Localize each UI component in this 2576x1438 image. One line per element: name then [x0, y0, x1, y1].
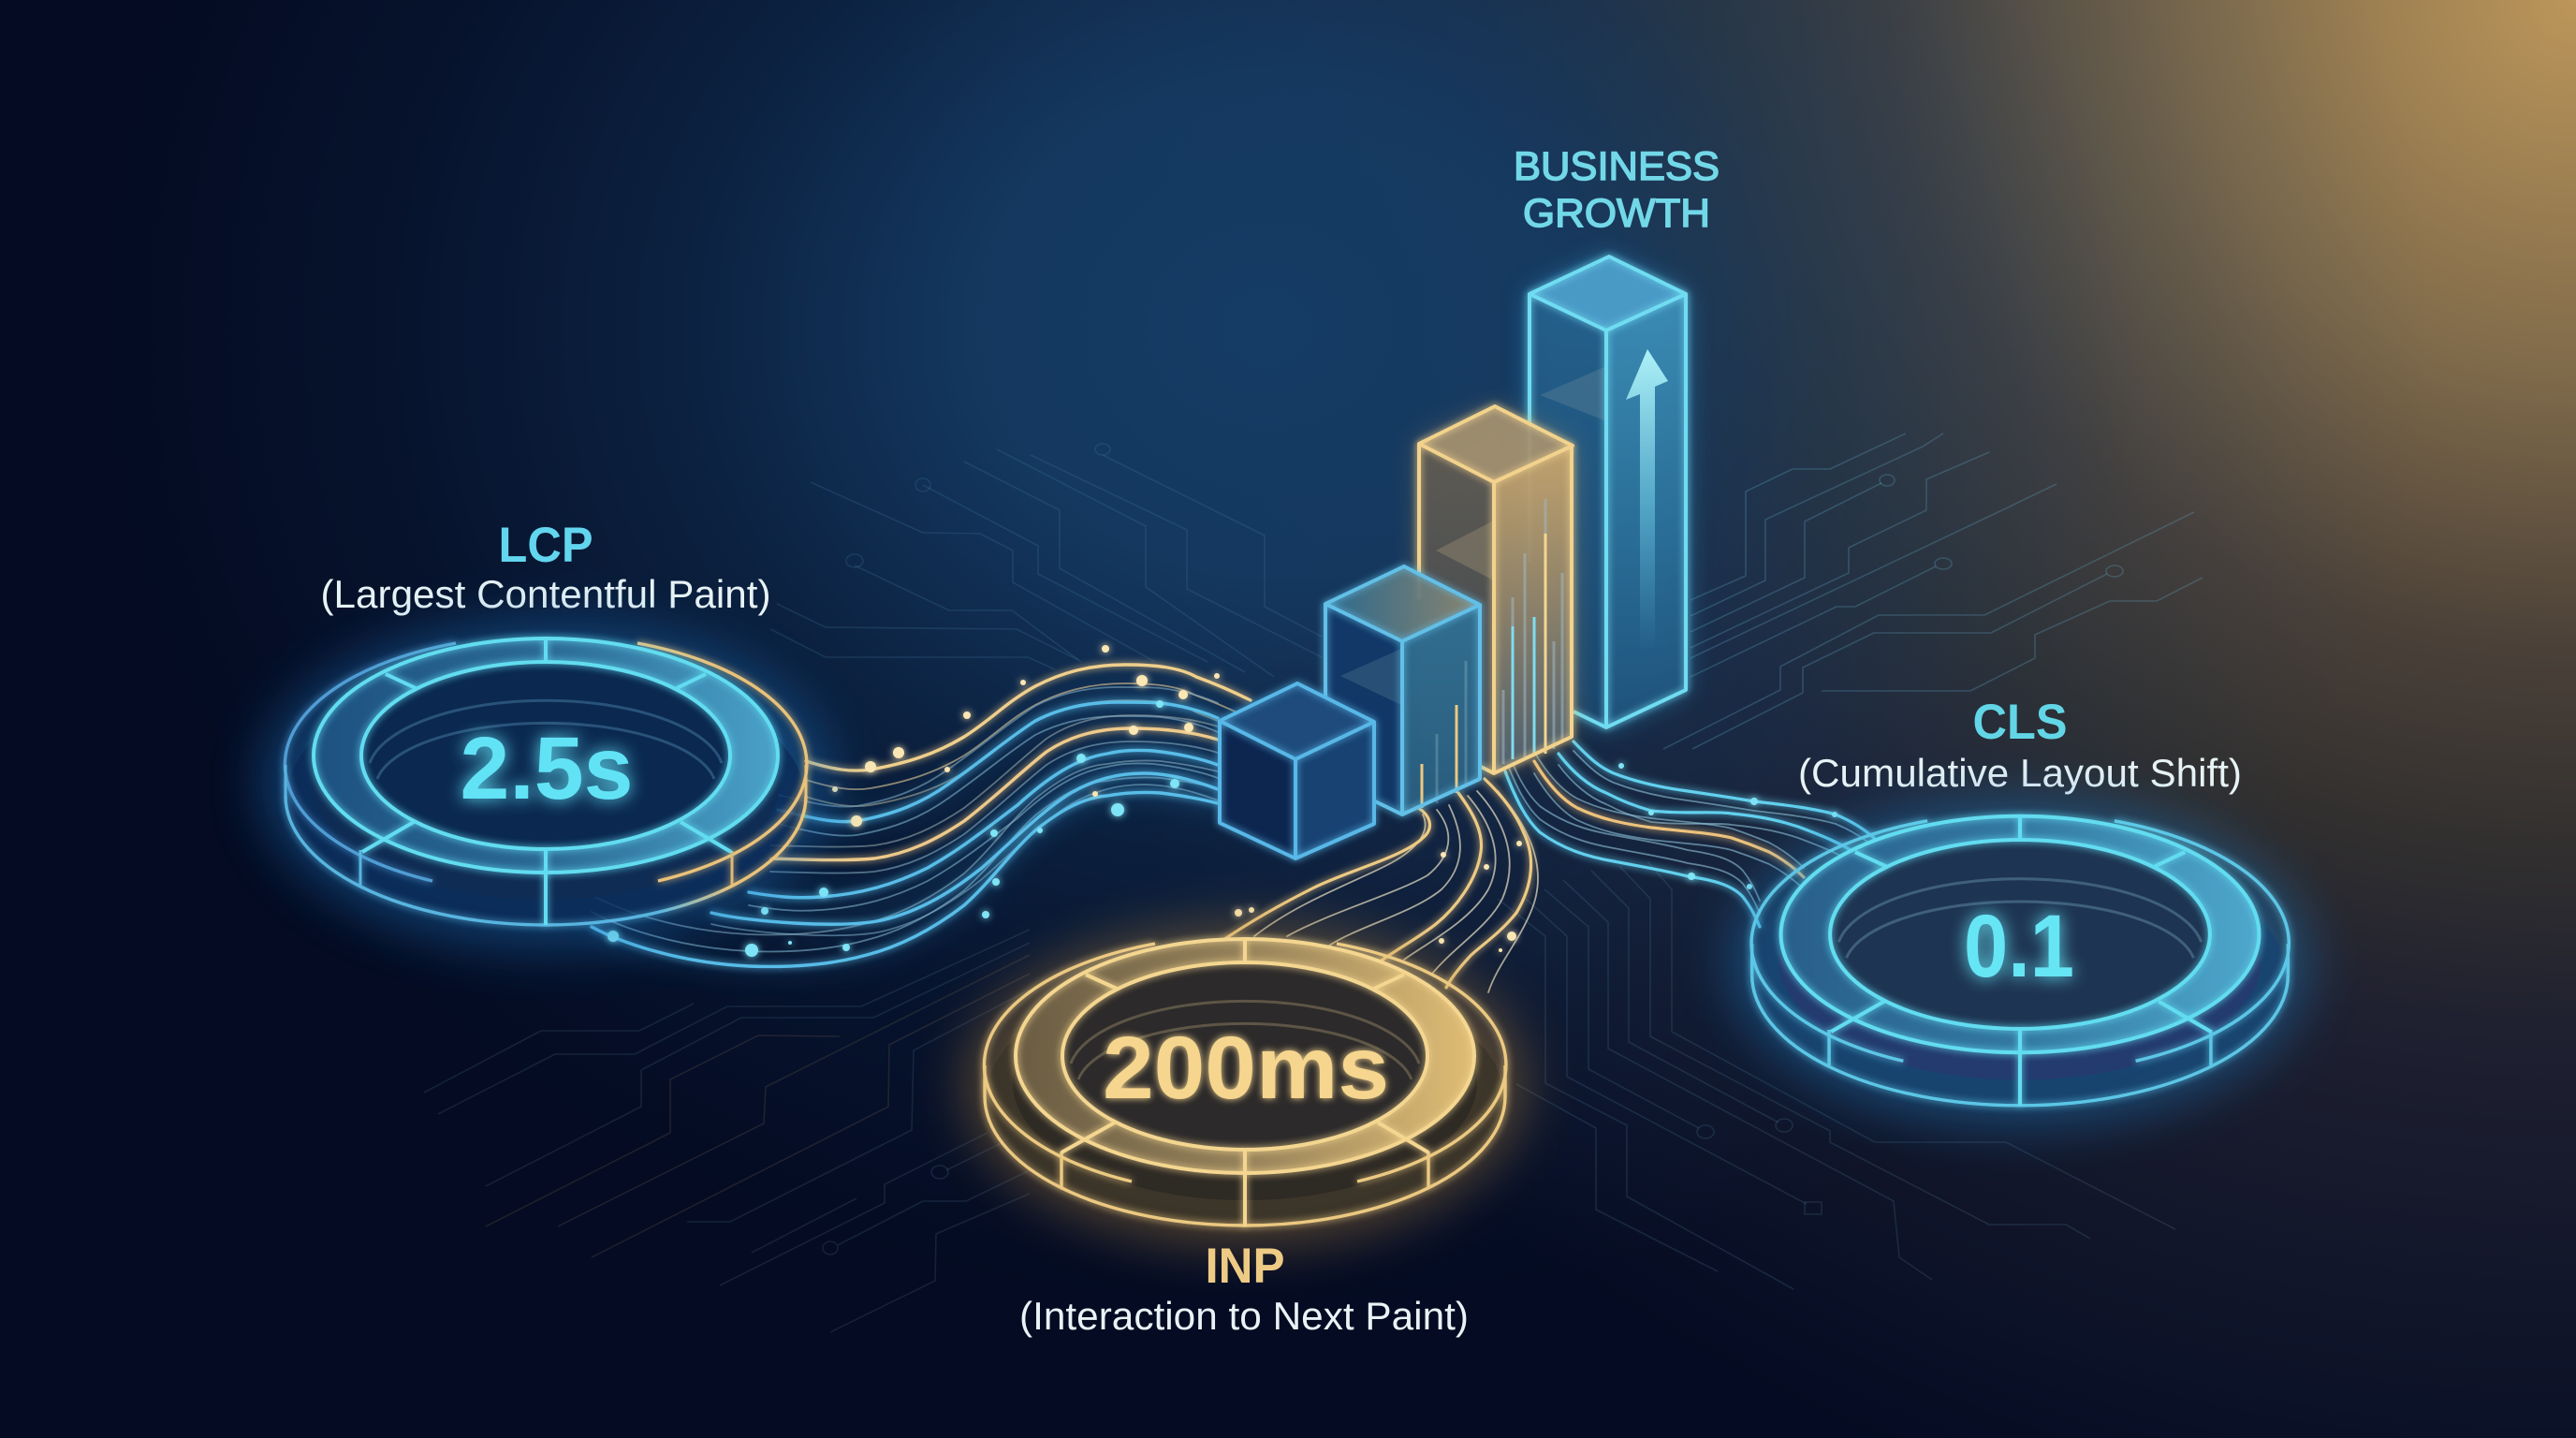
LCP ring: [260, 620, 831, 947]
business growth heading: GROWTH: [1523, 191, 1710, 236]
LCP ring top lines: [314, 638, 778, 925]
INP heading: INP: [1206, 1239, 1284, 1294]
panel: INP metric: [964, 923, 1526, 1338]
main stream lines: [592, 665, 1251, 966]
CLS ring rim lines: [1751, 821, 2289, 1106]
data stream: CLS to growth bars: [1505, 741, 1874, 927]
panel: CLS metric: [1731, 695, 2309, 1125]
main stream lines: [1505, 741, 1874, 927]
gold bar streaks: [1503, 499, 1562, 764]
CLS heading: CLS: [1973, 695, 2067, 750]
LCP subtitle: (Largest Contentful Paint): [320, 572, 771, 616]
INP ring rim lines: [984, 944, 1506, 1225]
data stream: LCP to growth bars: [592, 665, 1251, 966]
LCP value: 2.5s: [461, 719, 633, 818]
LCP heading: LCP: [498, 518, 593, 573]
stream glow: [592, 702, 1218, 966]
main stream lines: [1223, 779, 1531, 988]
bar 3: gold bar: [1419, 406, 1573, 773]
CLS ring: [1731, 800, 2309, 1125]
bar 1: small cube: [1220, 683, 1374, 858]
CLS ring top lines: [1781, 816, 2259, 1106]
CLS subtitle: (Cumulative Layout Shift): [1798, 751, 2242, 795]
particles: [607, 645, 1837, 957]
LCP ring rim lines: [285, 643, 807, 925]
mid bar streaks: [1422, 661, 1466, 808]
INP ring: [964, 923, 1526, 1245]
business growth heading: [1514, 144, 1720, 236]
bar 4: tallest blue bar with arrow: [1530, 257, 1686, 727]
data stream: INP to growth bars: [1223, 779, 1538, 992]
INP ring top lines: [1016, 939, 1474, 1226]
INP subtitle: (Interaction to Next Paint): [1019, 1294, 1469, 1338]
bar 2: mid blue bar: [1325, 566, 1480, 814]
thin stream lines: [592, 683, 1251, 951]
CLS value: 0.1: [1964, 897, 2074, 996]
INP value: 200ms: [1103, 1019, 1389, 1118]
thin stream lines: [1505, 745, 1874, 914]
business growth heading: BUSINESS: [1514, 144, 1720, 189]
thin stream lines: [1254, 791, 1538, 992]
growth arrow: [1626, 349, 1668, 652]
chart: growth bars: [1220, 257, 1686, 858]
panel: LCP metric: [260, 518, 831, 947]
circuit traces background: [424, 433, 2203, 1332]
